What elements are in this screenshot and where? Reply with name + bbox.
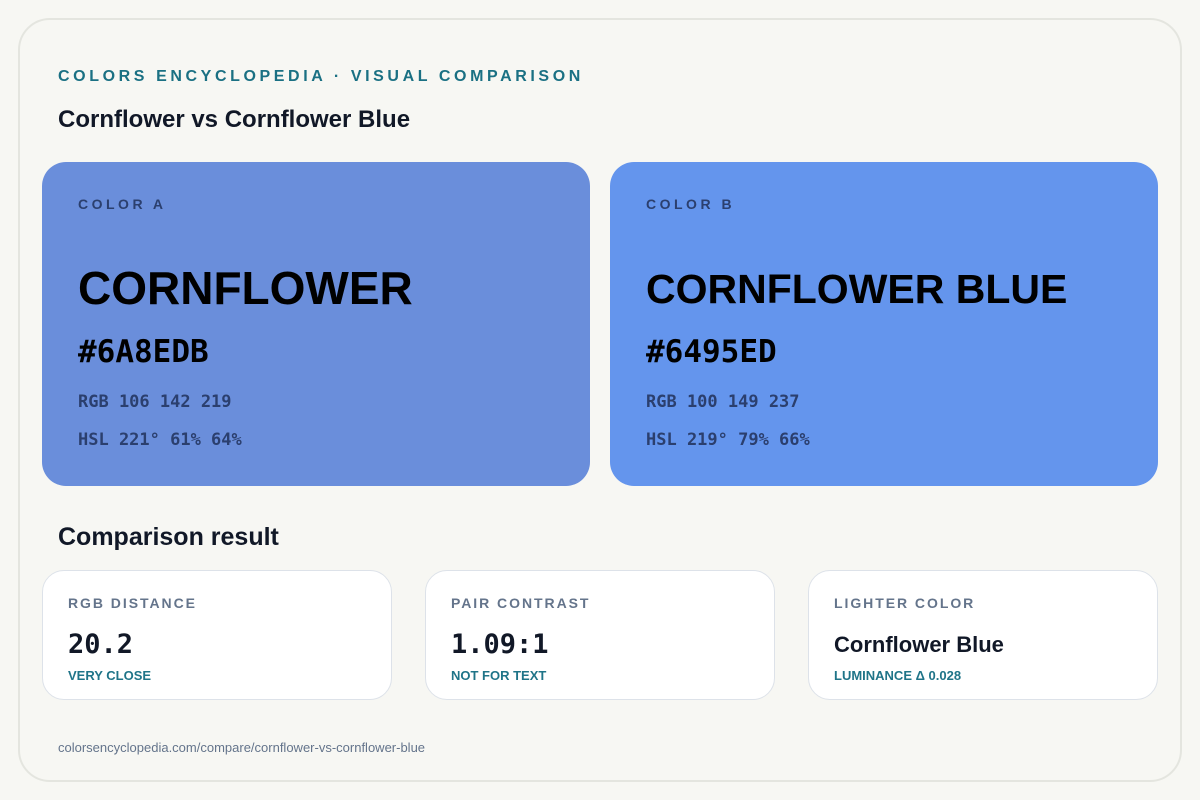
- note: VERY CLOSE: [68, 668, 151, 683]
- panel: color B: [610, 162, 1158, 486]
- value: 20.2: [68, 629, 133, 660]
- title: Cornflower vs Cornflower Blue: [58, 106, 410, 133]
- footer url: colorsencyclopedia.com/compare/cornflower-vs-cornflower-blue: [58, 740, 425, 755]
- value: Cornflower Blue: [834, 632, 1004, 657]
- value: 1.09:1: [451, 629, 549, 660]
- card: RGB distance: [42, 570, 392, 700]
- label: PAIR CONTRAST: [451, 595, 590, 611]
- note: LUMINANCE Δ 0.028: [834, 668, 961, 683]
- color B label: COLOR B: [646, 196, 735, 212]
- panel: color A: [42, 162, 590, 486]
- card: pair contrast: [425, 570, 775, 700]
- color A hex: #6A8EDB: [78, 334, 209, 370]
- color B RGB: RGB 100 149 237: [646, 392, 800, 412]
- note: NOT FOR TEXT: [451, 668, 546, 683]
- color A RGB: RGB 106 142 219: [78, 392, 232, 412]
- card: lighter color: [808, 570, 1158, 700]
- label: RGB DISTANCE: [68, 595, 197, 611]
- eyebrow heading: COLORS ENCYCLOPEDIA · VISUAL COMPARISON: [58, 68, 584, 85]
- color B HSL: HSL 219° 79% 66%: [646, 430, 810, 450]
- color A label: COLOR A: [78, 196, 167, 212]
- color B hex: #6495ED: [646, 334, 777, 370]
- section heading: Comparison result: [58, 523, 279, 551]
- label: LIGHTER COLOR: [834, 595, 975, 611]
- color B name: CORNFLOWER BLUE: [646, 266, 1067, 312]
- color A HSL: HSL 221° 61% 64%: [78, 430, 242, 450]
- color A name: CORNFLOWER: [78, 262, 413, 314]
